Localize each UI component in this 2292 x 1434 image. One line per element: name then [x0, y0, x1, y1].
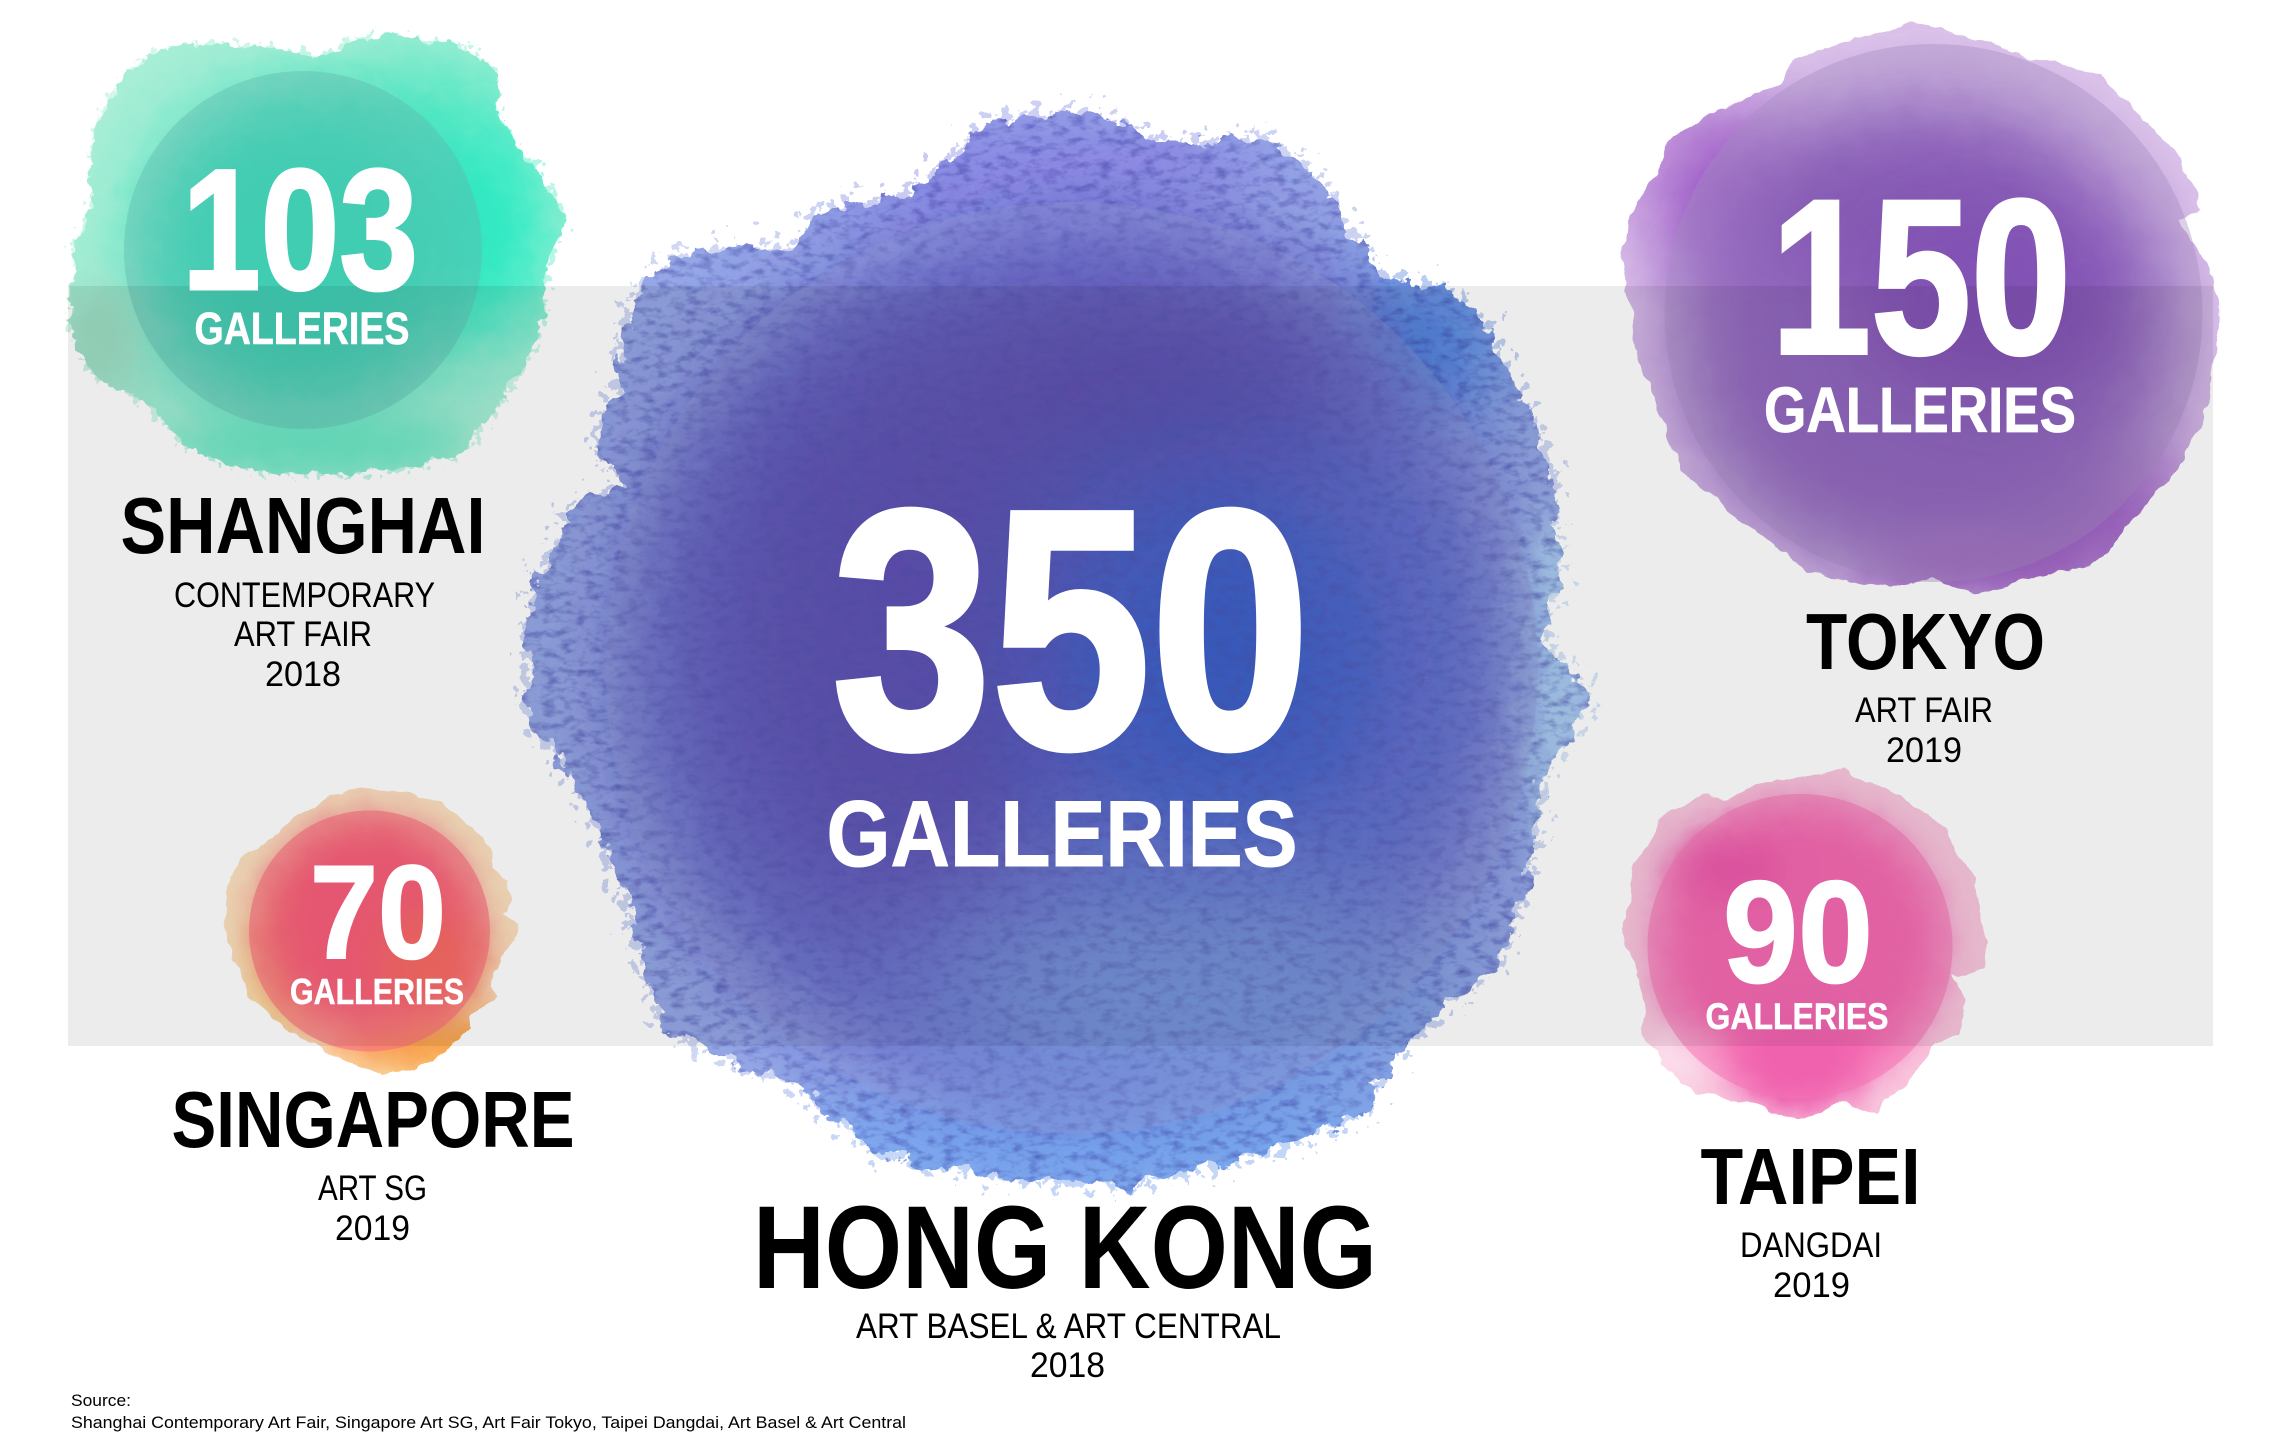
- panel: Hong Kong: [753, 440, 1377, 1385]
- circle overlay: Tokyo: [1664, 44, 2202, 582]
- heading: Taipei: TAIPEI: [1700, 1132, 1920, 1221]
- text block: fair name and year: [856, 1307, 1281, 1385]
- text block: fair name and year: 2019: [1886, 731, 1962, 770]
- watercolour blob: Taipei: [1622, 768, 1988, 1120]
- heading: Singapore: SINGAPORE: [172, 1075, 574, 1164]
- text block: fair name and year: ART FAIR: [234, 615, 372, 654]
- number: 150 galleries: 150: [1771, 154, 2071, 400]
- source note: Source:: [71, 1391, 131, 1410]
- text block: fair name and year: ART FAIR: [1855, 691, 1993, 730]
- text block: fair name and year: [1855, 691, 1993, 770]
- label: galleries: GALLERIES: [194, 303, 410, 354]
- text block: fair name and year: CONTEMPORARY: [174, 576, 435, 615]
- text block: fair name and year: 2018: [1030, 1346, 1105, 1385]
- watercolour blob: Shanghai: [63, 26, 574, 482]
- heading: Shanghai: SHANGHAI: [120, 481, 486, 570]
- number: 90 galleries: 90: [1723, 851, 1873, 1013]
- circle overlay: Hong Kong: [606, 202, 1538, 1134]
- grey background band: [68, 286, 2213, 1046]
- watercolour blob: Tokyo: [1600, 10, 2220, 610]
- circle overlay: Shanghai: [124, 71, 482, 429]
- number: 70 galleries: 70: [310, 839, 446, 987]
- panel: Shanghai: [120, 134, 486, 694]
- panel: Taipei: [1700, 851, 1920, 1305]
- number: 350 galleries: 350: [832, 440, 1310, 820]
- source note: [71, 1391, 906, 1432]
- watercolour blob: Singapore: [223, 788, 518, 1075]
- label: galleries: GALLERIES: [1706, 996, 1888, 1037]
- text block: fair name and year: ART SG: [318, 1169, 427, 1208]
- label: galleries: GALLERIES: [826, 781, 1298, 886]
- label: galleries: GALLERIES: [1764, 374, 2076, 446]
- text block: fair name and year: [1740, 1226, 1882, 1305]
- circle overlay: Taipei: [1648, 794, 1952, 1099]
- text block: fair name and year: 2019: [1773, 1266, 1850, 1305]
- circle overlay: Singapore: [249, 810, 490, 1052]
- label: galleries: GALLERIES: [290, 971, 464, 1012]
- watercolour blob: Hong Kong: [500, 90, 1650, 1220]
- text block: fair name and year: 2019: [335, 1209, 410, 1248]
- text block: fair name and year: ART BASEL & ART CENTRAL: [856, 1307, 1281, 1346]
- heading: Hong Kong: HONG KONG: [753, 1182, 1377, 1314]
- source note: Shanghai Contemporary Art Fair, Singapore Art SG, Art Fair Tokyo, Taipei Dangdai, Art Basel & Art Central: [71, 1413, 906, 1432]
- text block: fair name and year: 2018: [265, 655, 341, 694]
- text block: fair name and year: DANGDAI: [1740, 1226, 1882, 1265]
- heading: Tokyo: TOKYO: [1806, 597, 2045, 686]
- text block: fair name and year: [318, 1169, 427, 1248]
- panel: Tokyo: [1764, 154, 2076, 770]
- text block: fair name and year: [174, 576, 435, 694]
- panel: Singapore: [172, 839, 574, 1248]
- number: 103 galleries: 103: [182, 134, 418, 326]
